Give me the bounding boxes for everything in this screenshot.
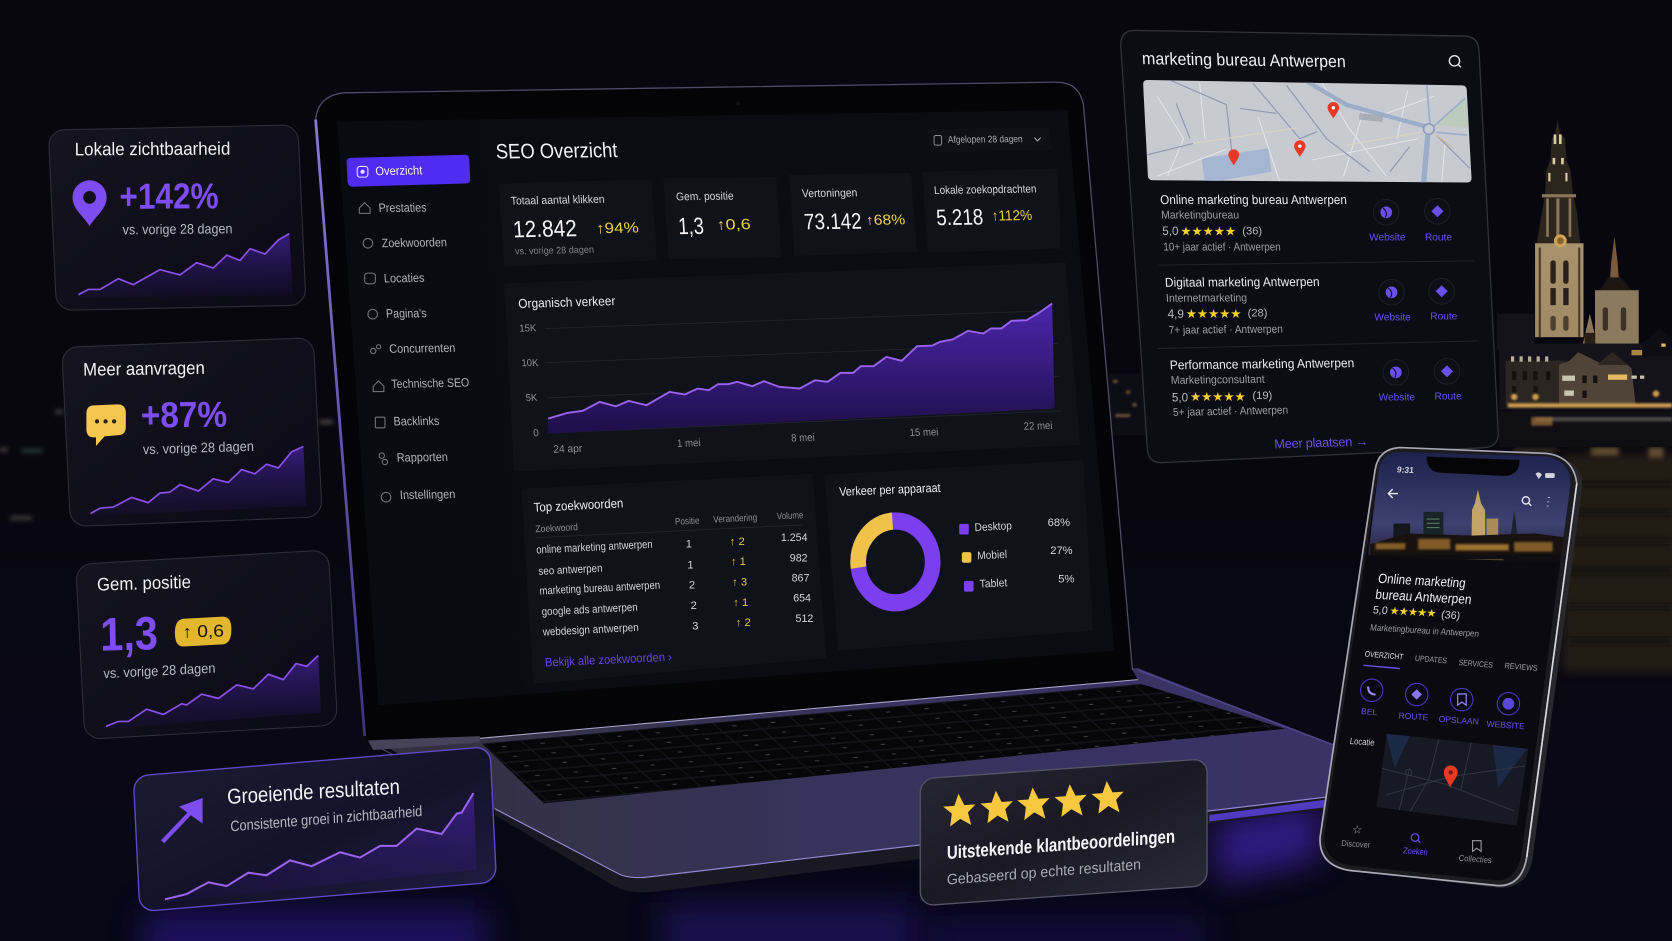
y axis labels: 0 [533,428,539,439]
laptop lid [316,82,1138,750]
cathedral tower [1535,120,1583,337]
x axis labels: 8 mei [791,432,815,444]
x axis labels: 22 mei [1023,420,1053,433]
stat card: Lokale zoekopdrachten: ↑112% [991,208,1033,225]
buttons: website and route: Route [1425,232,1452,243]
keyword names: seo antwerpen [538,563,603,578]
result 2: ★★★★★ [1186,307,1241,321]
background: purple floor reflections [144,800,1320,941]
badge: +0,6 [175,617,231,647]
nav item: Instellingen [381,487,456,502]
background: river reflections [1514,447,1672,672]
buttons: website and route: Website [1374,312,1411,323]
action: Website [1486,693,1525,731]
bottom nav: Discover: ☆ [1352,824,1363,837]
legend: Desktop: 68% [1048,517,1070,529]
legend: Mobiel [962,545,1073,563]
buttons: website and route: Route [1430,311,1458,322]
result 2 [1165,274,1458,337]
table header: Positie [675,516,700,528]
result 3: 5+ jaar actief · Antwerpen [1173,405,1288,419]
keyword names: webdesign antwerpen [542,622,639,639]
table header: Verandering [713,512,757,526]
sidebar navigation [347,155,470,502]
nav item: Pagina's [368,306,427,321]
action: Route [1398,683,1429,722]
y axis labels: 10K [521,358,539,369]
nav item: Technische SEO: Technische SEO [391,376,470,391]
stat card: Lokale zoekopdrachten: 5.218 [935,204,984,230]
card: Groeiende resultaten: Consistente groei in zichtbaarheid [230,803,423,835]
sparkline [165,793,477,903]
card: Uitstekende klantbeoordelingen: Uitstekende klantbeoordelingen [947,826,1175,863]
phone [1320,448,1582,888]
legend: Tablet [964,573,1074,592]
panel: Top zoekwoorden table: Top zoekwoorden [533,495,624,515]
buttons: website and route: Website [1379,392,1415,403]
action: Route: ROUTE [1398,710,1429,722]
cathedral transept and dome [1582,237,1639,346]
place name: Online marketing [1377,571,1467,591]
y axis labels: 5K [525,393,538,404]
stat card: Gem. positie [663,177,782,259]
stat card: Totaal aantal klikken: 12.842 [512,215,578,242]
stat card: Vertoningen [789,173,917,256]
action: Bel: BEL [1361,706,1378,717]
result 1: (36) [1242,226,1262,238]
card: Groeiende resultaten: Groeiende resultaten [227,775,400,809]
buttons: website and route [1369,198,1452,243]
volumes: 654 [793,593,811,605]
x axis labels [553,420,1053,456]
stat card: Lokale zoekopdrachten: Lokale zoekopdrachten [934,183,1037,197]
buttons: website and route: Website [1369,232,1406,243]
nav item: Rapporten: Rapporten [396,450,449,465]
phone body [1320,448,1582,888]
nav item: Zoekwoorden: Zoekwoorden [381,235,447,250]
keyword names [536,539,660,639]
stat card: Lokale zoekopdrachten [922,169,1061,253]
result 3: Marketingconsultant [1171,374,1266,387]
panel: Verkeer per apparaat: Verkeer per apparaat [839,481,941,499]
card: Meer aanvragen: vs. vorige 28 dagen [143,438,254,457]
volumes [781,532,813,625]
date selector: Afgelopen 28 dagen [948,134,1023,146]
changes: ↑ 2 [736,617,751,629]
result 2: 7+ jaar actief · Antwerpen [1168,324,1283,337]
phone screen [1324,452,1571,880]
result 3: 5,0 [1172,391,1189,404]
nav item: Overzicht (active): Overzicht [375,163,423,178]
action: Website: WEBSITE [1486,719,1525,731]
keyword names: google ads antwerpen [541,602,638,618]
gridlines [545,310,1062,433]
buttons: website and route [1374,278,1458,323]
icon: speech bubble [86,404,126,446]
table header [535,510,804,535]
bottom nav: Discover [1341,824,1371,850]
legend: Mobiel: 27% [1050,545,1073,557]
metric: 1,3 [100,607,158,661]
laptop [316,82,1348,892]
sparkline [91,446,307,516]
card: Groeiende resultaten [133,747,496,912]
result 3: Performance marketing Antwerpen [1169,355,1355,372]
rating: (36) [1440,609,1461,622]
card: Gem. positie: vs. vorige 28 dagen [103,660,216,681]
background: Antwerp cathedral skyline [1109,120,1672,447]
nav item: Technische SEO [373,376,470,392]
hero photo: city at night [1368,452,1571,562]
old town houses [1497,314,1672,447]
bottom nav: Zoeken [1403,834,1429,857]
stat card: Vertoningen: ↑68% [865,212,906,229]
place name: bureau Antwerpen [1375,587,1473,607]
stat card: Vertoningen: Vertoningen [801,187,858,200]
stat card: Gem. positie: ↑0,6 [716,216,751,234]
stat card: Totaal aantal klikken [499,179,657,267]
positions: 3 [692,620,698,632]
tabs: UPDATES [1414,654,1448,665]
action: Bel [1361,679,1383,717]
panel: local search results: marketing bureau Antwerpen [1142,49,1346,71]
link: Bekijk alle zoekwoorden: Bekijk alle zoekwoorden › [544,650,672,670]
action: Opslaan: OPSLAAN [1438,714,1479,727]
buttons: website and route: Route [1435,391,1462,402]
positions [686,539,698,632]
y axis labels: 15K [519,323,537,335]
nav item: Pagina's: Pagina's [386,306,427,321]
bottom nav: Zoeken: Zoeken [1403,845,1429,857]
action: Opslaan [1438,688,1479,727]
result 3: ★★★★★ [1190,390,1245,404]
panel: local search results [1121,30,1498,463]
bottom nav: Collecties [1458,841,1492,865]
result 2: Digitaal marketing Antwerpen [1165,274,1320,290]
place name [1375,571,1473,607]
nav item: Concurrenten: Concurrenten [389,341,456,356]
changes: ↑ 1 [733,597,748,609]
x axis labels: 24 apr [553,443,583,456]
donut chart [858,521,933,603]
icons: back, search, menu [1388,489,1549,506]
result 3 [1169,355,1462,419]
background: left river lights [0,410,333,520]
rating: ★★★★★ [1389,605,1437,620]
stat card: Vertoningen: 73.142 [803,209,862,234]
result 1: Online marketing bureau Antwerpen [1160,192,1347,207]
positions: 2 [691,600,697,612]
legend: Mobiel: Mobiel [977,549,1007,562]
result 2: Internetmarketing [1166,292,1247,305]
stat card: Totaal aantal klikken: ↑94% [595,220,639,237]
table header: Volume [776,510,804,522]
metric: +87% [140,394,228,436]
bottom nav: Discover: Discover [1341,838,1371,850]
nav item: Backlinks: Backlinks [393,414,440,428]
card: Lokale zichtbaarheid [48,125,306,310]
stat card: Totaal aantal klikken: vs. vorige 28 dagen [515,245,594,257]
x axis labels: 1 mei [677,437,701,450]
nav item: Locaties: Locaties [383,271,425,285]
result 1: 5,0 [1162,225,1179,238]
keyword names: marketing bureau antwerpen [539,580,660,598]
x axis labels: 15 mei [909,426,939,439]
card: Uitstekende klantbeoordelingen: Gebaseerd op echte resultaten [947,856,1141,889]
volumes: 512 [796,613,813,625]
legend: Desktop [959,517,1070,535]
nav item: Prestaties [359,201,427,215]
icon: search [1449,56,1461,67]
nav item: Rapporten [379,450,449,465]
result 2: (28) [1248,308,1268,320]
tabs: REVIEWS [1504,661,1538,673]
result 1: Marketingbureau [1161,210,1239,222]
panel: Top zoekwoorden table [521,474,826,684]
laptop base and keyboard [368,668,1348,892]
card: Meer aanvragen: Meer aanvragen [83,358,205,380]
status bar and notch [1396,457,1555,479]
sparkline [106,655,321,729]
laptop screen [337,110,1114,705]
card: Uitstekende klantbeoordelingen [920,759,1207,906]
panel: Organisch verkeer chart [504,262,1080,472]
nav item: Instellingen: Instellingen [399,487,456,502]
stat card: Gem. positie: 1,3 [677,213,705,239]
panel: Verkeer per apparaat [824,460,1093,651]
card: Lokale zichtbaarheid: vs. vorige 28 dagen [123,220,233,237]
legend: Tablet: Tablet [979,577,1008,591]
area chart [548,304,1055,434]
result 1 [1160,192,1452,254]
volumes: 1.254 [781,532,808,544]
result 1: 10+ jaar actief · Antwerpen [1163,242,1281,254]
badge: +0,6: ↑ 0,6 [182,621,224,642]
left bank lights [1109,373,1147,435]
nav item: Locaties [365,271,425,285]
stat card: Totaal aantal klikken: Totaal aantal klikken [510,194,605,208]
result 1: ★★★★★ [1180,225,1236,239]
changes [730,536,751,629]
tabs: SERVICES [1458,658,1493,670]
category: Marketingbureau in Antwerpen [1370,622,1480,639]
bottom nav: Collecties: Collecties [1458,853,1492,865]
keyword names: online marketing antwerpen [536,539,653,557]
volumes: 867 [792,573,809,585]
legend: Desktop: Desktop [974,520,1012,534]
positions: 1 [686,539,692,551]
changes: ↑ 1 [731,556,746,568]
status bar and notch: 9:31 [1396,464,1415,475]
tabs: OVERZICHT [1364,650,1404,662]
card: Gem. positie: Gem. positie [97,572,191,595]
result 3: (19) [1252,390,1273,402]
positions: 1 [687,559,694,571]
stat card: Gem. positie: Gem. positie [676,191,734,203]
nav item: Backlinks [375,414,440,428]
icon: phone map pin [1444,765,1458,787]
icon: growth arrow [163,798,203,842]
positions: 2 [689,579,695,591]
metric: +142% [119,175,219,217]
rating: 5,0 [1372,604,1389,617]
sparkline [78,234,293,298]
card: Gem. positie [76,550,338,739]
buttons: website and route [1379,358,1462,403]
panel: Organisch verkeer chart: Organisch verkeer [518,293,616,311]
changes: ↑ 3 [732,576,747,588]
location label: Locatie [1349,736,1375,748]
volumes: 982 [790,552,808,564]
date selector [928,127,1052,153]
table header: Zoekwoord [535,522,578,535]
y axis labels [519,323,539,439]
tabs [1363,650,1538,673]
result 2: 4,9 [1168,308,1184,321]
card: Lokale zichtbaarheid: Lokale zichtbaarheid [75,139,230,159]
dark map [1377,734,1528,826]
link: Meer plaatsen: Meer plaatsen → [1274,434,1368,451]
icon: map pins [1228,102,1339,165]
changes: ↑ 2 [730,536,745,548]
map [1143,80,1472,182]
rating [1372,604,1461,622]
icon: location pin [73,180,107,226]
nav item: Overzicht (active) [347,155,470,187]
icon: five stars [942,780,1125,827]
dashboard title: SEO Overzicht [495,139,618,164]
card: Meer aanvragen [62,338,322,527]
nav item: Prestaties: Prestaties [378,201,427,215]
legend: Tablet: 5% [1058,573,1074,585]
